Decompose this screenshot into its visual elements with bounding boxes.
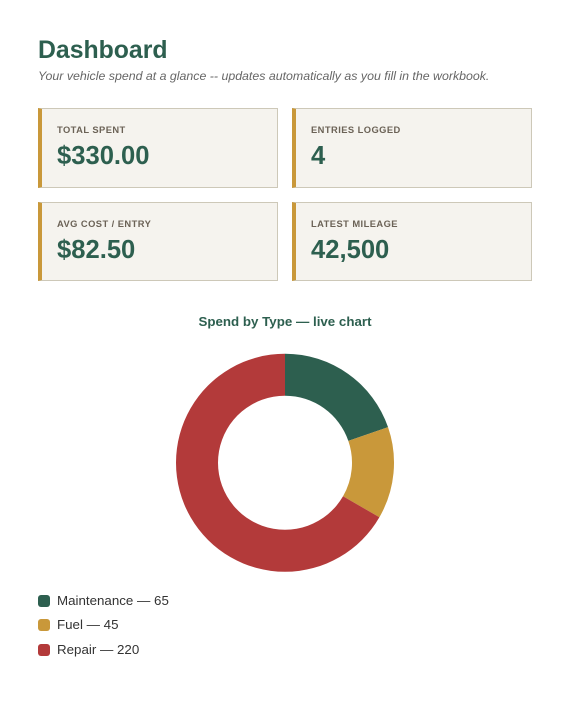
card: latest mileage: LATEST MILEAGE bbox=[311, 219, 398, 229]
legend: fuel: Fuel — 45 bbox=[57, 617, 118, 632]
chart heading: Spend by Type — live chart bbox=[198, 314, 372, 329]
card: entries logged: ENTRIES LOGGED bbox=[311, 125, 401, 135]
card: total spent: $330.00 bbox=[57, 142, 150, 170]
card: entries logged bbox=[292, 108, 532, 188]
card: latest mileage bbox=[292, 202, 532, 281]
card: latest mileage: 42,500 bbox=[311, 236, 389, 264]
subtitle: Your vehicle spend at a glance -- updates automatically as you fill in the workbook. bbox=[38, 69, 489, 83]
legend: maintenance: Maintenance — 65 bbox=[57, 593, 169, 608]
legend: repair: Repair — 220 bbox=[57, 642, 139, 657]
card: total spent bbox=[38, 108, 278, 188]
card: avg cost per entry: AVG COST / ENTRY bbox=[57, 219, 151, 229]
title: Dashboard bbox=[38, 37, 168, 64]
segment: maintenance bbox=[285, 354, 388, 441]
card: total spent: TOTAL SPENT bbox=[57, 125, 126, 135]
card: avg cost per entry: $82.50 bbox=[57, 236, 135, 264]
card: entries logged: 4 bbox=[311, 142, 325, 170]
donut chart bbox=[176, 354, 394, 572]
segment: repair bbox=[176, 354, 379, 572]
card: avg cost per entry bbox=[38, 202, 278, 281]
segment: fuel bbox=[343, 427, 394, 517]
